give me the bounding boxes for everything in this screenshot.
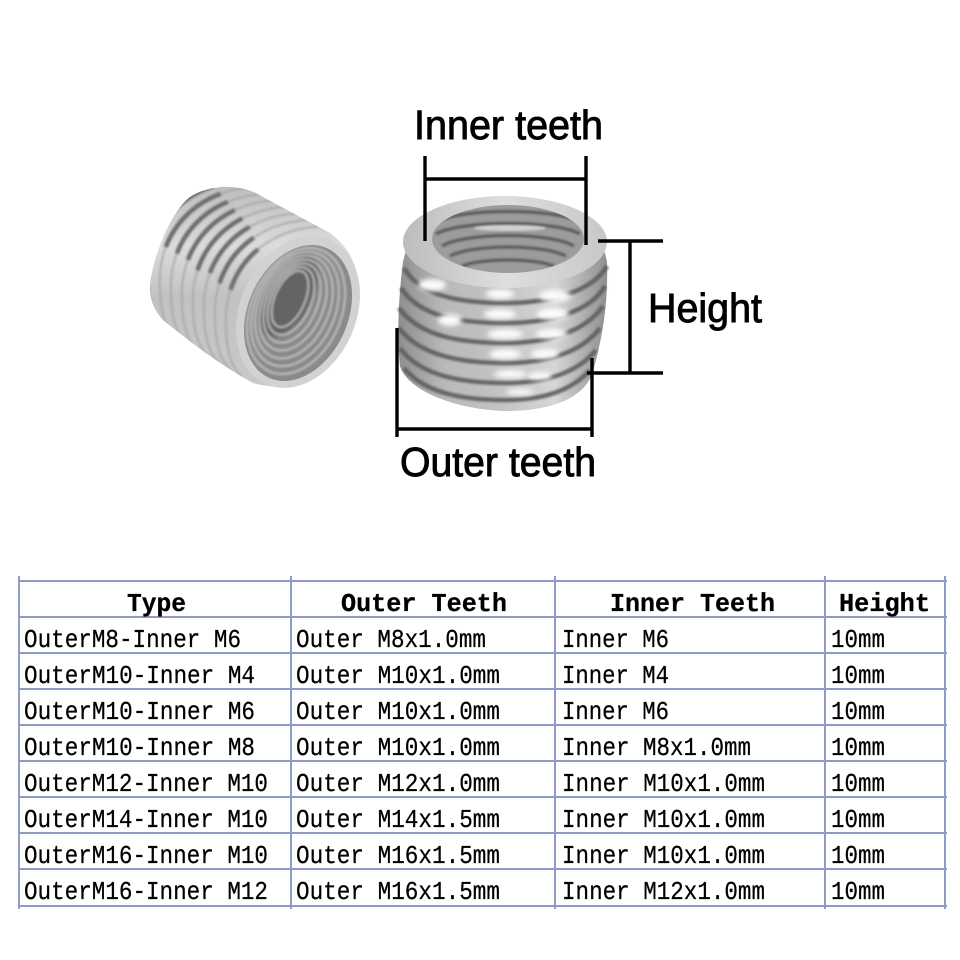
dimension: inner teeth [414, 102, 603, 245]
table grid [19, 576, 947, 909]
table row 8: Inner M12x1.0mm [562, 877, 765, 907]
table header [127, 589, 930, 619]
table row 7 [24, 841, 885, 871]
table row 7: Inner M10x1.0mm [562, 841, 765, 871]
icon: left threaded insert [150, 186, 360, 388]
table row 1: Inner M6 [562, 625, 669, 655]
table row 2: Outer M10x1.0mm [296, 661, 500, 691]
table row 5: Inner M10x1.0mm [562, 769, 765, 799]
table header: Inner Teeth [610, 589, 775, 619]
table row 6 [24, 805, 885, 835]
table row 4: Inner M8x1.0mm [562, 733, 751, 763]
table row 5: 10mm [831, 769, 885, 799]
table row 5 [24, 769, 885, 799]
table row 6: OuterM14-Inner M10 [24, 805, 268, 835]
table row 7: Outer M16x1.5mm [296, 841, 500, 871]
table row 6: 10mm [831, 805, 885, 835]
table row 2 [24, 661, 885, 691]
table row 3 [24, 697, 885, 727]
table row 4: 10mm [831, 733, 885, 763]
table header: Outer Teeth [341, 589, 507, 619]
table row 7: 10mm [831, 841, 885, 871]
label: outer teeth: Outer teeth [400, 439, 596, 485]
icon: right threaded insert [398, 196, 607, 411]
specification table [19, 576, 947, 909]
table row 1: Outer M8x1.0mm [296, 625, 486, 655]
table row 8: 10mm [831, 877, 885, 907]
table row 4: Outer M10x1.0mm [296, 733, 500, 763]
table header: Height [839, 589, 930, 619]
table row 3: 10mm [831, 697, 885, 727]
table row 1 [24, 625, 885, 655]
table row 2: OuterM10-Inner M4 [24, 661, 255, 691]
table row 7: OuterM16-Inner M10 [24, 841, 268, 871]
table row 5: OuterM12-Inner M10 [24, 769, 268, 799]
table row 8: OuterM16-Inner M12 [24, 877, 268, 907]
table row 4 [24, 733, 885, 763]
table row 2: 10mm [831, 661, 885, 691]
dimension: outer teeth [397, 328, 596, 485]
table row 3: Inner M6 [562, 697, 669, 727]
table row 8 [24, 877, 885, 907]
table row 3: OuterM10-Inner M6 [24, 697, 255, 727]
table row 1: 10mm [831, 625, 885, 655]
label: height: Height [648, 285, 763, 331]
table row 5: Outer M12x1.0mm [296, 769, 500, 799]
label: inner teeth: Inner teeth [414, 102, 603, 148]
table row 3: Outer M10x1.0mm [296, 697, 500, 727]
dimension: height [587, 241, 763, 373]
table header: Type [127, 589, 186, 619]
table row 1: OuterM8-Inner M6 [24, 625, 241, 655]
table row 6: Outer M14x1.5mm [296, 805, 500, 835]
table row 2: Inner M4 [562, 661, 669, 691]
table row 4: OuterM10-Inner M8 [24, 733, 255, 763]
table row 6: Inner M10x1.0mm [562, 805, 765, 835]
table row 8: Outer M16x1.5mm [296, 877, 500, 907]
